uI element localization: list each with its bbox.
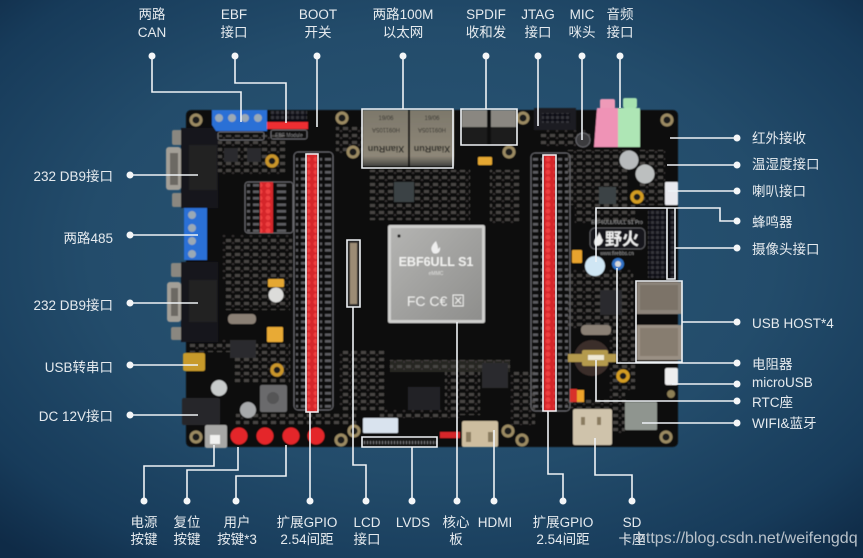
inductor — [260, 385, 287, 412]
callout: 电源按键 — [130, 445, 214, 547]
white connector — [363, 418, 398, 433]
callout: 电阻器: 电阻器 — [752, 357, 793, 372]
left GPIO header — [294, 152, 333, 412]
callout: 两路100M以太网 — [362, 7, 453, 168]
callout: EBF接口 — [220, 7, 286, 123]
ethernet connectors: XianRun — [414, 144, 450, 154]
callout: 232 DB9接口 lower: 232 DB9接口 — [33, 297, 113, 313]
callout: 音频接口: 音频 — [606, 6, 634, 22]
ethernet connectors: XianRun — [368, 144, 404, 154]
green audio jack — [618, 98, 640, 147]
red and yellow jumper — [570, 389, 584, 402]
ethernet connectors: 19/06 — [378, 116, 394, 122]
callout: 232 DB9接口 lower — [33, 297, 198, 313]
callout: LCD接口: 接口 — [354, 531, 380, 547]
orange capacitor — [572, 250, 582, 263]
ethernet connectors — [363, 110, 454, 166]
callout: DC 12V接口: DC 12V接口 — [39, 408, 113, 424]
watermark: https://blog.csdn.net/weifengdq — [637, 530, 858, 547]
yellow tantalum capacitors — [267, 279, 284, 342]
callout: 用户按键*3: 按键*3 — [217, 532, 257, 547]
SPDIF connectors — [462, 110, 516, 145]
callout: 扩展GPIO left — [277, 154, 337, 547]
fire logo: EBF6ULL/6ULL S1 Pro — [591, 220, 643, 226]
callout: 红外接收 — [670, 130, 806, 146]
callout: 两路485 — [63, 231, 198, 246]
upper DB9 connector — [166, 128, 218, 208]
callout: MIC咪头 — [568, 7, 596, 140]
callout: 红外接收: 红外接收 — [752, 130, 806, 146]
power button — [205, 425, 227, 448]
SD card slot — [573, 409, 612, 445]
callout: SD卡座 — [595, 438, 646, 547]
callout: 232 DB9接口 upper — [33, 168, 198, 184]
callout: 核心板: 核心 — [442, 515, 470, 530]
fire logo: www.firebbs.cn — [600, 251, 634, 257]
red user and reset buttons — [230, 428, 324, 444]
BOOT switch and EBF module header: EBF Module — [275, 133, 303, 139]
ethernet connectors: 19/06 — [424, 116, 440, 122]
callout: HDMI — [478, 430, 512, 530]
buzzer and resistor — [585, 256, 624, 276]
callout: 温湿度接口: 温湿度接口 — [752, 156, 820, 172]
callout: 电源按键: 按键 — [130, 532, 158, 547]
right GPIO header — [531, 153, 570, 411]
callout: 喇叭接口 — [668, 183, 806, 199]
camera header — [648, 210, 675, 278]
callout: BOOT开关: BOOT — [299, 7, 337, 22]
callout: microUSB — [672, 375, 813, 390]
callout: 核心板: 板 — [449, 532, 463, 547]
panel: black PCB — [186, 110, 678, 447]
RTC battery holder — [568, 340, 616, 376]
callout: 复位按键 — [174, 447, 238, 547]
callout: 两路CAN: 两路 — [138, 7, 166, 22]
callout: 核心板 — [442, 322, 470, 547]
callout: EBF接口: EBF — [221, 7, 247, 22]
component texture — [190, 125, 665, 435]
callout: MIC咪头: MIC — [570, 7, 595, 22]
callout: JTAG接口: JTAG — [521, 7, 555, 22]
callout: 两路100M以太网: 以太网 — [383, 25, 423, 40]
blue 485 terminal — [184, 208, 207, 260]
callout: 两路485: 两路485 — [63, 231, 113, 246]
callout: USB转串口 — [45, 360, 198, 375]
callout: MIC咪头: 咪头 — [568, 25, 596, 40]
LCD connector — [347, 240, 360, 307]
callout: 扩展GPIO right — [533, 155, 593, 547]
callout: 232 DB9接口 upper: 232 DB9接口 — [33, 168, 113, 184]
BOOT switch and EBF module header — [267, 111, 308, 139]
callout: 喇叭接口: 喇叭接口 — [752, 183, 806, 199]
HDMI connector — [462, 421, 498, 447]
callout: 扩展GPIO left: 2.54间距 — [280, 532, 334, 547]
callout: 蜂鸣器 — [596, 208, 793, 262]
callout: 音频接口: 接口 — [606, 24, 634, 40]
callout: microUSB: microUSB — [752, 375, 813, 390]
callout: SD卡座: SD — [623, 515, 642, 530]
callout: BOOT开关: 开关 — [304, 25, 332, 40]
callout: USB HOST*4: USB HOST*4 — [752, 316, 834, 331]
callout: JTAG接口 — [521, 7, 555, 126]
callout: JTAG接口: 接口 — [524, 24, 552, 40]
lower DB9 connector — [167, 262, 218, 342]
callout: SPDIF收和发: 收和发 — [466, 25, 507, 40]
core board chip — [388, 225, 485, 323]
callout: LVDS: LVDS — [396, 515, 430, 530]
DC jack — [182, 398, 220, 425]
crystal oscillators — [228, 314, 611, 335]
ICs — [224, 148, 622, 410]
callout: 蜂鸣器: 蜂鸣器 — [752, 214, 793, 230]
callout: 扩展GPIO right: 扩展GPIO — [533, 515, 593, 530]
callout: 复位按键: 复位 — [174, 514, 200, 530]
callout: 摄像头接口 — [667, 208, 820, 279]
callout: BOOT开关 — [299, 7, 337, 127]
fire logo: 野火 — [605, 230, 639, 249]
callout: 温湿度接口 — [667, 156, 820, 172]
callout: 两路CAN — [138, 7, 241, 122]
development board photo — [166, 98, 682, 448]
callout: 电源按键: 电源 — [130, 515, 158, 530]
callout: 扩展GPIO right: 2.54间距 — [536, 532, 590, 547]
callout: 复位按键: 按键 — [174, 532, 201, 547]
callout: LCD接口 — [347, 240, 381, 547]
WIFI module — [625, 402, 657, 430]
callout: 两路100M以太网: 两路100M — [373, 7, 433, 22]
callout: LCD接口: LCD — [353, 515, 381, 530]
callout: SD卡座: 卡座 — [618, 532, 646, 547]
blue CAN terminal — [212, 110, 267, 140]
speaker connector — [665, 182, 678, 205]
callout: RTC座 — [596, 360, 793, 410]
callout: EBF接口: 接口 — [220, 24, 248, 40]
callout: SPDIF收和发: SPDIF — [466, 7, 506, 22]
callout: 扩展GPIO left: 扩展GPIO — [277, 515, 337, 530]
USB host connectors — [637, 282, 682, 360]
callout: LVDS — [362, 437, 437, 530]
callout: SPDIF收和发 — [461, 7, 517, 145]
callout: RTC座: RTC座 — [752, 395, 793, 410]
callout: 用户按键*3: 用户 — [224, 514, 250, 530]
red GPIO block — [245, 182, 293, 233]
brass mounting holes — [191, 113, 672, 445]
MIC head — [576, 133, 590, 147]
callout: USB HOST*4 — [636, 281, 834, 362]
mini USB — [183, 353, 205, 371]
callout: WIFI&蓝牙: WIFI&蓝牙 — [752, 416, 816, 431]
pink audio jack — [594, 99, 618, 147]
callout: HDMI: HDMI — [478, 515, 512, 530]
electrolytic capacitors — [211, 150, 654, 418]
antenna connector — [667, 390, 675, 398]
core board chip: eMMC — [429, 271, 444, 277]
callout: WIFI&蓝牙 — [642, 416, 816, 431]
callout: 两路CAN: CAN — [138, 25, 166, 40]
small red header — [440, 432, 460, 438]
callout: 音频接口 — [606, 6, 634, 108]
small yellow capacitor — [478, 157, 492, 165]
fire logo — [590, 220, 645, 257]
callout: 电阻器 — [617, 268, 793, 372]
callout: USB转串口: USB转串口 — [45, 360, 113, 375]
callout: 用户按键*3 — [217, 445, 286, 547]
core board chip: EBF6ULL S1 — [399, 255, 473, 269]
callout: DC 12V接口 — [39, 408, 198, 424]
core board chip: FC C€ ⊠ — [407, 293, 465, 309]
callout: 摄像头接口: 摄像头接口 — [752, 241, 820, 257]
JTAG connector — [534, 108, 576, 130]
micro USB — [665, 368, 678, 385]
ethernet connectors: H091105A — [418, 126, 446, 132]
ethernet connectors: H091105A — [372, 126, 400, 132]
LVDS connector — [362, 438, 437, 447]
